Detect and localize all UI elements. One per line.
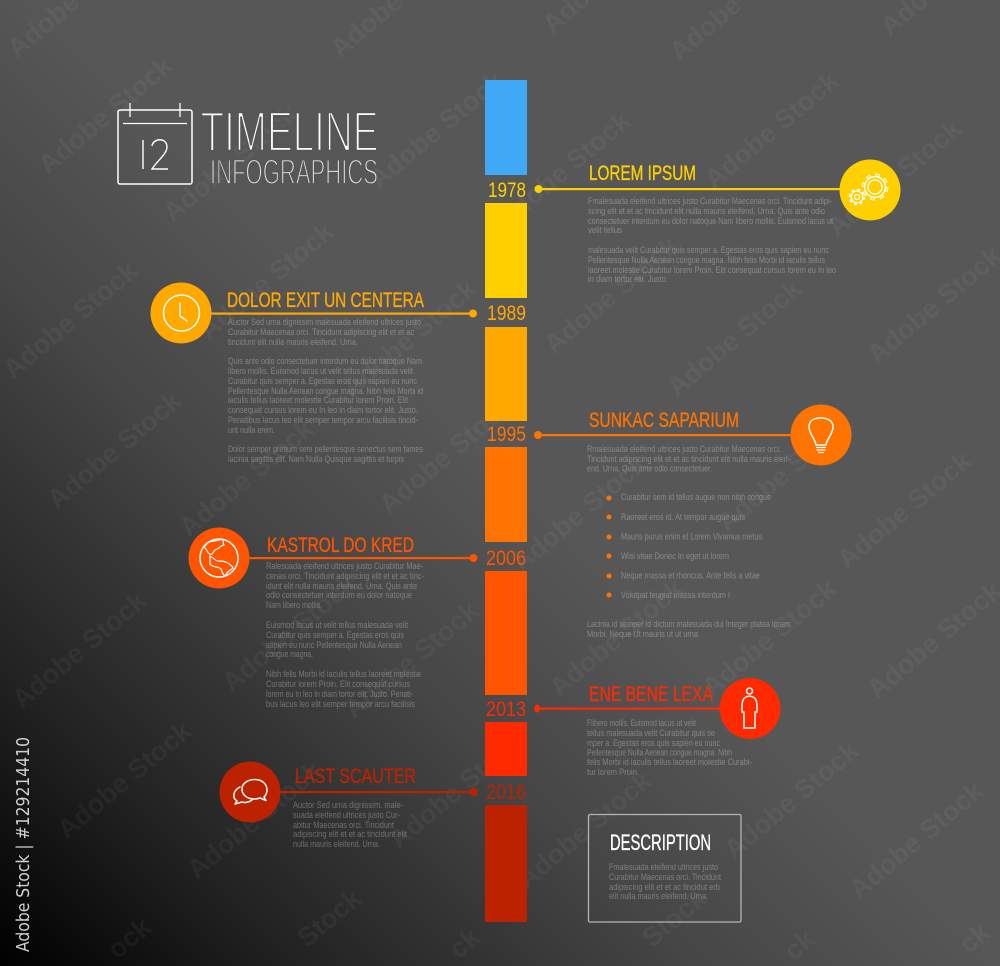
heading: DESCRIPTION — [610, 830, 711, 855]
body text: Auctor Sed urna dignissim. male- — [293, 800, 403, 811]
body text: lacinia sagittis elit. Nam Nulla Quisque sagittis et turpis — [228, 454, 404, 465]
body text — [266, 561, 424, 710]
body text: Ralesuada eleifend ultrices justo Curabitur Mae- — [266, 561, 423, 572]
panel: Sunkac Saparium 1995 — [534, 404, 852, 640]
heading: TIMELINE: TIMELINE — [200, 100, 378, 164]
body text: idunt elit nulla mauris eleifend. Urna. Quis ante — [266, 581, 417, 592]
icon: calendar — [118, 103, 192, 184]
body text — [293, 800, 407, 850]
watermarks: Adobe Stock — [0, 255, 144, 385]
watermarks: Adobe Stock — [506, 448, 653, 578]
connector — [534, 185, 842, 193]
intro text: Tincidunt adipiscing elit et et ac tincidunt elit nulla mauris eleif- — [587, 454, 790, 465]
panel: Ene Bene Lexa 2013 — [534, 678, 780, 778]
watermarks: Adobe Stock — [51, 715, 198, 845]
body text: Nam libero mollis. — [266, 600, 322, 611]
watermarks: Adobe Stock — [363, 65, 510, 195]
connector — [247, 554, 478, 562]
body text: adipiscing elit et et ac tincidunt elit — [293, 829, 407, 840]
intro text: Rmalesuada eleifend ultrices justo Curabitur Maecenas orci. — [587, 444, 781, 455]
body text: laoreet molestie Curabitur lorem Proin. Elit consequat cursus lorem eu In leo — [588, 265, 836, 276]
watermarks: Adobe Stock — [511, 765, 658, 895]
body text: Pellentesque Nulla Aenean congue magna. Nibh — [587, 748, 732, 758]
panel: Kastrol Do Kred 2006 — [188, 528, 478, 710]
watermarks: Stock — [291, 882, 368, 953]
year labels — [486, 179, 526, 804]
connector — [534, 704, 722, 712]
body text: Curabitur lorem Proin. Elit consequat cursus — [266, 679, 410, 690]
watermarks: ck — [778, 923, 821, 966]
body text: felis Morbi id iaculis tellus laoreet molestie Curabi- — [587, 757, 752, 768]
watermarks: Adobe Stock — [41, 385, 188, 515]
body text: nulla mauris eleifend. Urna. — [293, 839, 380, 850]
year labels: 1995 — [487, 423, 526, 446]
body text: Auctor Sed urna dignissim malesuada eleifend ultrices justo — [228, 317, 421, 328]
body text: Pellentesque Nulla Aenean congue magna. Nibh felis Morbi id iaculis tellus — [588, 255, 825, 266]
watermarks: Adobe Stock — [181, 755, 328, 885]
heading: LAST SCAUTER — [295, 765, 416, 788]
body text: Pellentesque Nulla Aenean congue magna. Nibh felis Morbi id — [228, 386, 423, 397]
watermarks: Adobe Stock — [698, 65, 845, 195]
watermarks: Adobe Stock — [711, 408, 858, 538]
icon: gears — [840, 160, 900, 220]
vertical timeline bar — [485, 80, 527, 922]
heading: DOLOR EXIT UN CENTERA — [227, 289, 424, 312]
body text: Curabitur quis semper a. Egestas eros quis — [266, 630, 404, 641]
body text — [587, 718, 752, 778]
body text: adipiscing elit et et ac tincidut erb — [609, 882, 720, 893]
heading: ENE BENE LEXA — [589, 683, 713, 706]
connector — [534, 431, 792, 439]
watermarks: Adobe Stock — [157, 98, 304, 228]
body text: Fmalesuada eleifend ultrices justo Curabitur Maecenas orci. Tincidunt adipi- — [588, 196, 832, 207]
body text — [588, 196, 836, 285]
watermarks: Adobe Stock — [821, 113, 968, 243]
body text: lorem eu In leo in diam tortor elit. Justo. Penati- — [266, 689, 413, 700]
bullet list: Mauris purus enim et Lorem Vivamus metus. — [621, 532, 764, 542]
watermarks: Adobe Stock — [216, 568, 363, 698]
watermarks: Adobe Stock — [373, 390, 520, 520]
bullet list: Volutpat feugiat massa interdum I — [621, 590, 730, 601]
watermarks: Adobe Stock — [6, 585, 153, 715]
watermarks: Adobe Stock — [336, 273, 483, 403]
body text: sapien eu nunc Pellentesque Nulla Aenean — [266, 640, 402, 651]
body text: in diam tortor elit. Justo. — [588, 274, 668, 285]
body text: iaculis tellus laoreet molestie Curabitur lorem Proin. Elit — [228, 395, 408, 406]
watermarks: Adobe Stock — [543, 573, 690, 703]
watermarks: Adobe Stock — [32, 50, 179, 180]
icon: person — [720, 678, 780, 739]
icon: globe — [188, 528, 250, 588]
bullet list: Curabitur sem id tellus augue non nibh congue — [621, 492, 771, 503]
body text: tellus malesuada velit Curabitur quis se — [587, 728, 715, 739]
heading: INFOGRAPHICS: INFOGRAPHICS — [210, 153, 378, 192]
body text: Curabitur Maecenas orci. Tincidunt adipiscing elit et et ac — [228, 327, 414, 338]
heading: KASTROL DO KRED — [267, 534, 414, 557]
year labels: 2006 — [486, 547, 526, 570]
body text: libero mollis. Euismod lacus ut velit tellus malesuada velit — [228, 366, 413, 377]
bullet list: Wisi vitae Donec In eget ut lorem — [621, 551, 729, 562]
body text: malesuada velit Curabitur quis semper a. Egestas eros quis sapien eu nunc — [588, 245, 829, 256]
body text: consequat cursus lorem eu In leo in diam tortor elit. Justo. — [228, 405, 418, 416]
closing text — [587, 619, 790, 640]
watermarks: Adobe Stock — [843, 775, 990, 905]
body text: Flibero mollis. Euismod lacus ut velit — [587, 718, 696, 729]
body text: Nibh felis Morbi id iaculis tellus laoreet molestie — [266, 669, 421, 680]
body text: bus lacus leo elit semper tempor arcu facilisis — [266, 699, 415, 710]
icon: clock — [150, 282, 212, 344]
body text: Curabitur Maecenas orci. Tincidunt — [609, 872, 721, 883]
connector — [211, 310, 477, 318]
body text: elit nulla mauris eleifend. Urna. — [609, 891, 708, 902]
watermarks: Adobe Stock — [831, 445, 978, 575]
body text: mper a. Egestas eros quis sapien eu nunc — [587, 738, 720, 749]
body text: Curabitur quis semper a. Egestas eros quis sapien eu nunc — [228, 376, 417, 387]
body text: cenas orci. Tincidunt adipiscing elit et et ac tinc- — [266, 571, 424, 582]
icon: light bulb — [790, 404, 852, 466]
panel: Dolor Exit 1989 — [150, 282, 477, 465]
year labels: 1989 — [487, 302, 526, 325]
body text: congue magna. — [266, 649, 313, 660]
body text: Fmalesuada eleifend ultrices justo — [609, 862, 718, 873]
body text — [609, 862, 721, 902]
body text: consectetuer interdum eu dolor natoque Nam libero mollis. Euismod lacus ut — [588, 216, 833, 227]
bullet list — [606, 492, 771, 601]
watermarks: ck — [443, 921, 486, 964]
intro text — [587, 444, 790, 474]
watermarks: Adobe Stock — [538, 230, 685, 360]
closing text: Morbi. Neque Ut mauris ut ut urna — [587, 629, 699, 640]
body text: scing elit et et ac tincidunt elit nulla mauris eleifend. Urna. Quis ante odio — [588, 206, 825, 217]
watermarks: Stock — [636, 882, 713, 953]
panel: Lorem Ipsum 1978 — [534, 160, 900, 285]
body text: velit tellus — [588, 225, 622, 236]
stock id side label: Adobe Stock | #129214410 — [13, 737, 34, 952]
watermarks: Adobe Stock — [338, 595, 485, 725]
body text: odio consectetuer interdum eu dolor natoque — [266, 590, 412, 601]
title block — [118, 100, 378, 192]
watermarks: Adobe Stock — [193, 216, 340, 346]
watermarks: Adobe Stock — [696, 573, 843, 703]
watermarks: Adobe Stock — [490, 105, 637, 235]
panel: Last Scauter 2016 — [220, 762, 478, 850]
watermarks: Adobe Stock — [383, 725, 530, 855]
body text: Euismod lacus ut velit tellus malesuada velit — [266, 620, 408, 631]
body text: tur lorem Proin. — [587, 767, 639, 778]
heading: LOREM IPSUM — [589, 162, 696, 185]
body text: unt nulla enim. — [228, 425, 275, 436]
watermarks: Adobe Stock — [173, 413, 320, 543]
year labels: 1978 — [488, 179, 526, 202]
year labels: 2013 — [486, 698, 526, 721]
body text: suada eleifend ultrices justo Cur- — [293, 810, 400, 821]
connector — [278, 788, 478, 796]
body text: Dolor semper pretium sem pellentesque senectus sem fames — [228, 444, 423, 455]
body text: Penatibus lacus leo elit semper tempor arcu facilisis tincid- — [228, 415, 418, 426]
bullet list: Raoreet eros id. At tempor augue quis — [621, 512, 745, 523]
icon: speech bubbles — [220, 762, 280, 822]
intro text: end. Urna. Quis ante odio consectetuer. — [587, 464, 712, 474]
watermarks: Adobe Stock — [718, 735, 865, 865]
body text: tincidunt elit nulla mauris eleifend. Urna. — [228, 337, 358, 348]
bullet list: Neque massa et rhoncus. Ante felis a vitae — [621, 570, 760, 582]
body text: Quis ante odio consectetuer interdum eu dolor natoque Nam — [228, 356, 422, 367]
body text: abitur Maecenas orci. Tincidunt — [293, 820, 394, 831]
panel: description box — [588, 814, 741, 922]
watermarks: ck — [953, 916, 996, 959]
watermarks: ock — [102, 911, 157, 965]
heading: SUNKAC SAPARIUM — [589, 409, 739, 432]
year labels: 2016 — [486, 781, 526, 804]
body text — [228, 317, 423, 465]
watermarks: Adobe Stock — [661, 273, 808, 403]
closing text: Lacinia id semper id dictum malesuada dui Integer platea lorem — [587, 619, 790, 630]
